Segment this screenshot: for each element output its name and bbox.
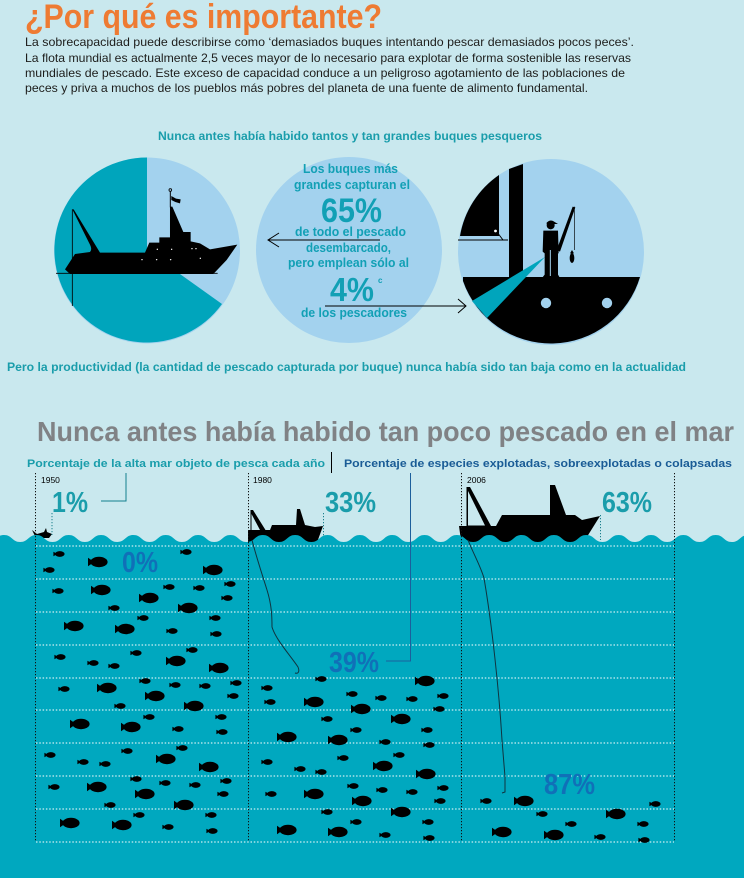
percentages: high seas bbox=[52, 487, 652, 519]
centre circle with statistics: c bbox=[378, 276, 383, 285]
fish shoal 2006 bbox=[480, 796, 661, 843]
year labels: 2006 bbox=[467, 475, 486, 485]
section heading: Nunca antes había habido tan poco pescado en el mar bbox=[37, 416, 734, 447]
percentages: exploited species bbox=[122, 547, 595, 801]
centre circle with statistics bbox=[256, 157, 442, 343]
percentages: exploited species: 39% bbox=[329, 647, 379, 679]
sea with waves bbox=[0, 535, 744, 878]
intro text block: peces y priva a muchos de los pueblos más pobres del planeta de una fuente de alimento fundamental. bbox=[25, 81, 588, 95]
pie chart: small vessels with fisherman bbox=[458, 159, 644, 345]
fish shoal 1950 bbox=[43, 549, 242, 834]
fish shoal 1980 bbox=[261, 676, 449, 841]
dotted depth grid bbox=[36, 546, 674, 842]
intro text block: La sobrecapacidad puede describirse como ‘demasiados buques intentando pescar demasiados pocos peces’. bbox=[25, 35, 634, 49]
ship 2006 bbox=[459, 485, 600, 548]
subheading: vessels: Nunca antes había habido tantos y tan grandes buques pesqueros bbox=[158, 131, 542, 143]
ship 1950 bbox=[32, 528, 52, 538]
percentages: high seas: 1% bbox=[52, 487, 88, 519]
dotted year columns bbox=[36, 473, 674, 842]
fishing line 2006 bbox=[468, 540, 505, 793]
percentages: exploited species: 87% bbox=[544, 769, 595, 801]
intro text block bbox=[25, 35, 634, 95]
fishing line 1980 bbox=[252, 540, 299, 673]
centre circle with statistics: grandes capturan el bbox=[294, 178, 410, 192]
intro text block: La flota mundial es actualmente 2,5 veces mayor de lo necesario para explotar de forma sostenible las reservas bbox=[25, 51, 631, 65]
legend: species percentage: Porcentaje de especies explotadas, sobreexplotadas o colapsadas bbox=[344, 458, 732, 470]
centre circle with statistics: 65% bbox=[321, 192, 382, 230]
centre circle with statistics: pero emplean sólo al bbox=[288, 256, 409, 270]
arrow: to large ship bbox=[268, 233, 380, 247]
year labels: 1950 bbox=[41, 475, 60, 485]
percentages: exploited species: 0% bbox=[122, 547, 158, 579]
centre circle with statistics: Los buques más bbox=[303, 162, 398, 176]
connector: species legend to 39% bbox=[386, 473, 410, 661]
connector: high seas legend to 1% bbox=[101, 473, 126, 501]
icon: fisherman with rod bbox=[542, 207, 575, 278]
centre circle with statistics: de los pescadores bbox=[301, 306, 407, 320]
icon: large ship bbox=[56, 189, 237, 306]
ship 1980 bbox=[248, 509, 323, 548]
year labels: 1980 bbox=[253, 475, 272, 485]
year labels bbox=[41, 475, 486, 485]
legend: high seas percentage: Porcentaje de la alta mar objeto de pesca cada año bbox=[27, 458, 325, 470]
subheading: productivity: Pero la productividad (la cantidad de pescado capturada por buque) nunca había sido tan baja como en la actualidad bbox=[7, 362, 686, 374]
percentages: high seas: 63% bbox=[602, 487, 652, 519]
intro text block: mundiales de pescado. Este exceso de capacidad conduce a un peligroso agotamiento de las poblaciones de bbox=[25, 66, 625, 80]
centre circle with statistics: 4% bbox=[330, 271, 374, 308]
centre circle with statistics: de todo el pescado bbox=[295, 225, 406, 239]
legend divider bbox=[330, 452, 332, 473]
centre circle with statistics: desembarcado, bbox=[306, 241, 391, 255]
percentages: high seas: 33% bbox=[325, 487, 376, 519]
pie chart: large vessels with ship bbox=[54, 157, 240, 344]
arrow: to fisherman bbox=[325, 299, 466, 313]
